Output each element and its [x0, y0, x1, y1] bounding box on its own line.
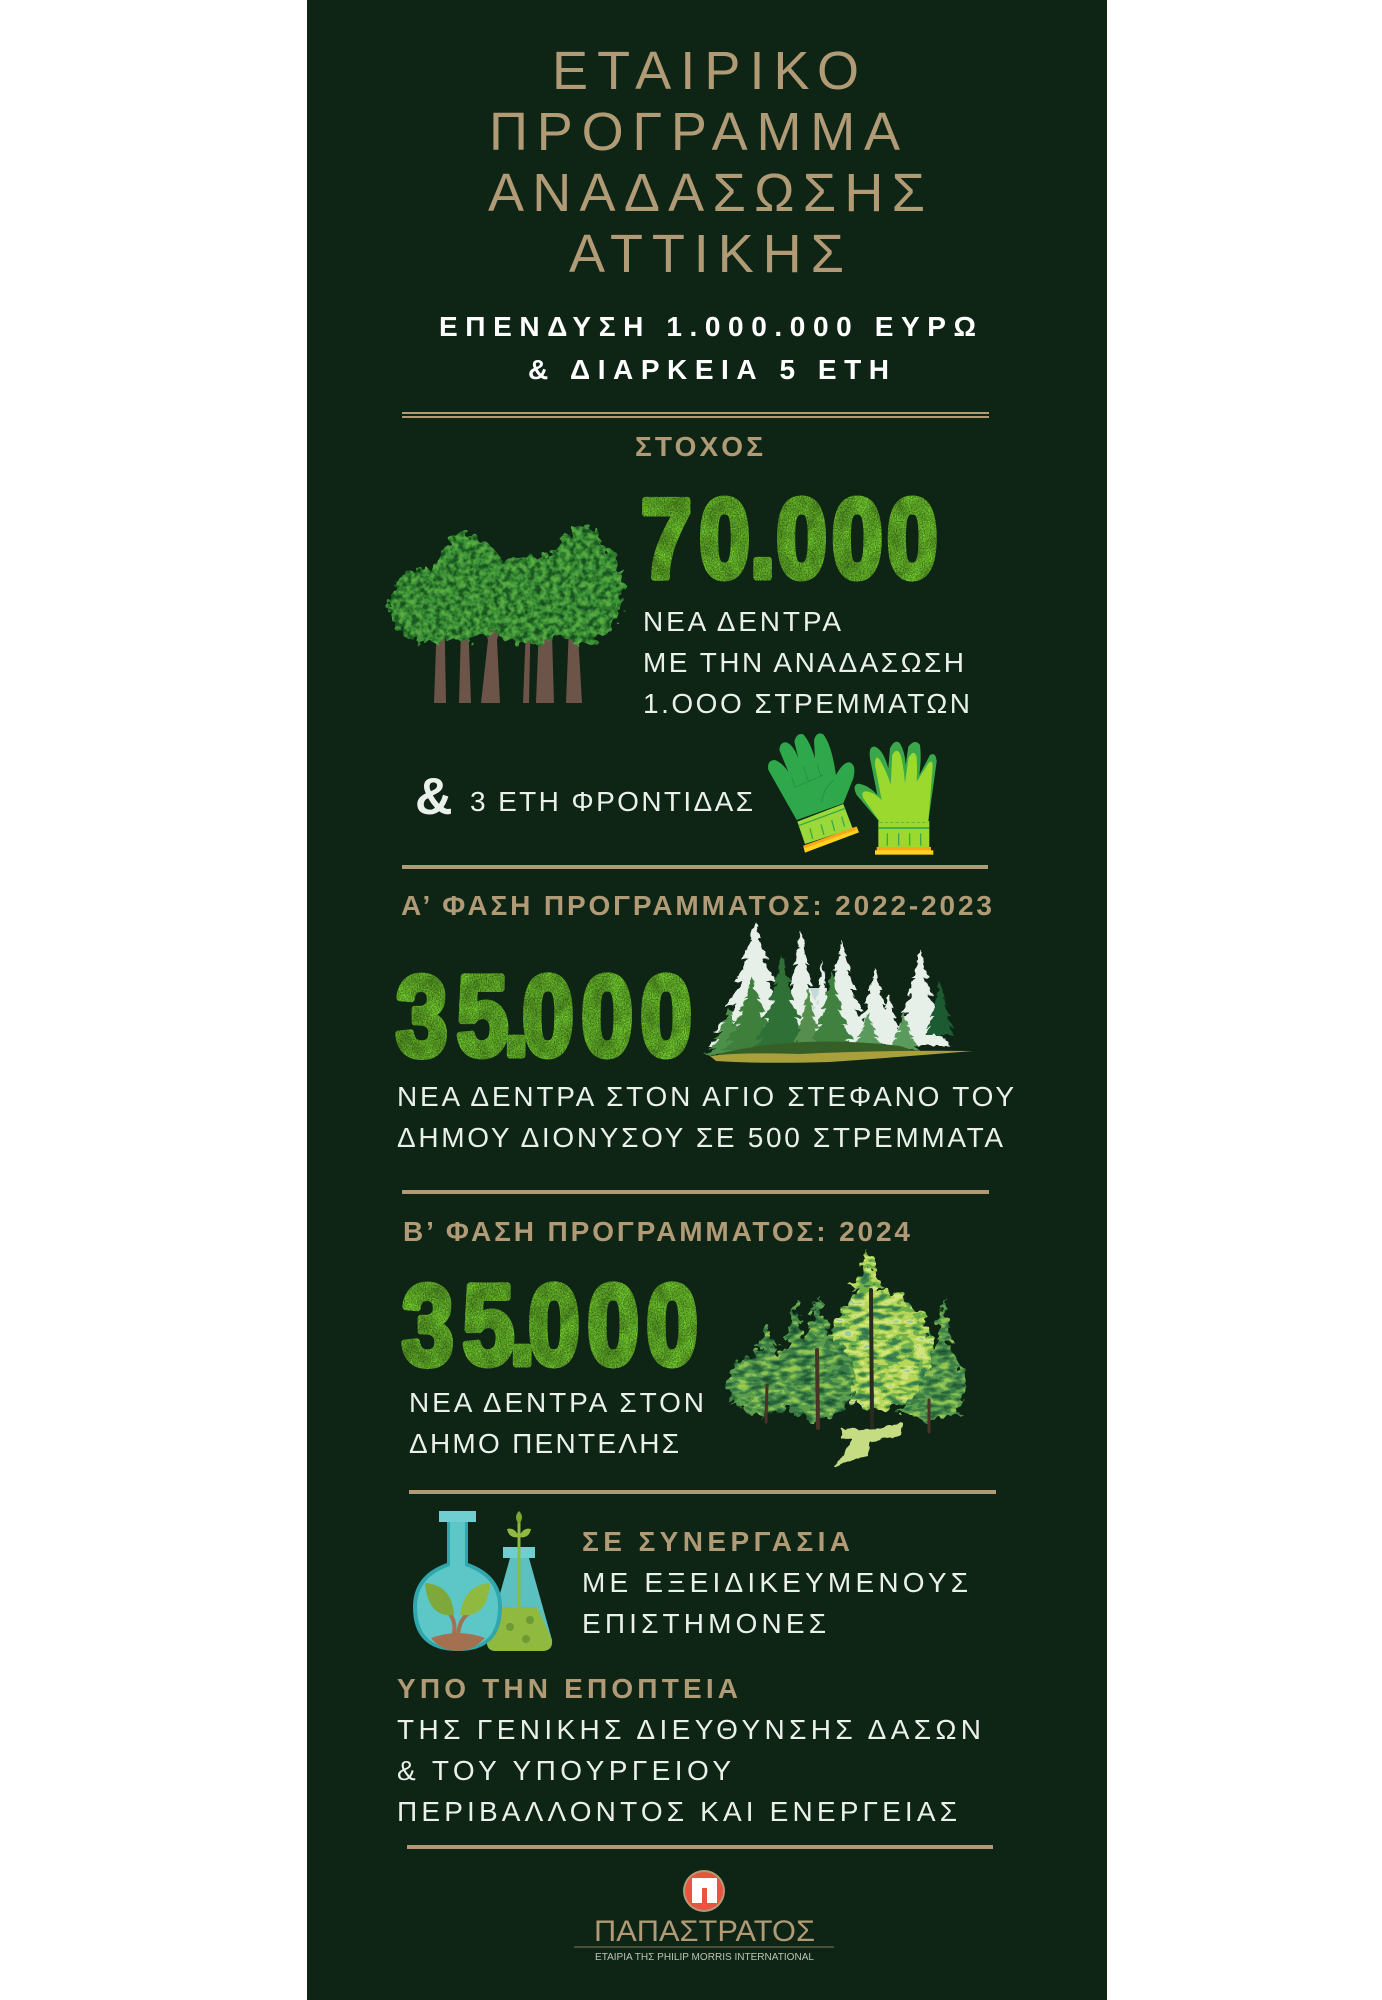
big number: 35.000: 35.000: [396, 952, 692, 1079]
text: Agios Stefanos location: ΝΕΑ ΔΕΝΤΡΑ ΣΤΟΝ ΑΓΙΟ ΣΤΕΦΑΝΟ ΤΟΥ: [397, 1081, 1014, 1112]
subtitle: investment and duration: & ΔΙΑΡΚΕΙΑ 5 ΕΤΗ: [528, 354, 889, 385]
logo: Papastratos: [574, 1870, 834, 1963]
illustration: conifer forest: [705, 922, 973, 1063]
icon: flasks with plant: [413, 1511, 552, 1651]
title: ΕΤΑΙΡΙΚΟ: [552, 41, 859, 101]
text block: under supervision: ΤΗΣ ΓΕΝΙΚΗΣ ΔΙΕΥΘΥΝΣΗΣ ΔΑΣΩΝ: [397, 1714, 981, 1745]
text: and 3 years of care: [415, 768, 753, 826]
title: ΠΡΟΓΡΑΜΜΑ: [489, 102, 900, 162]
section: scientists collaboration: [413, 1511, 968, 1651]
subtitle: investment and duration: [439, 311, 976, 385]
illustration: group of broadleaf trees: [390, 526, 624, 703]
text block: under supervision: & ΤΟΥ ΥΠΟΥΡΓΕΙΟΥ: [397, 1755, 731, 1786]
title: ΑΝΑΔΑΣΩΣΗΣ: [488, 163, 925, 223]
subtitle: investment and duration: ΕΠΕΝΔΥΣΗ 1.000.000 ΕΥΡΩ: [439, 311, 976, 342]
text: Agios Stefanos location: [397, 1081, 1014, 1153]
text: with specialist scientists: ΣΕ ΣΥΝΕΡΓΑΣΙΑ: [582, 1526, 850, 1557]
text: Agios Stefanos location: ΔΗΜΟΥ ΔΙΟΝΥΣΟΥ ΣΕ 500 ΣΤΡΕΜΜΑΤΑ: [397, 1122, 1003, 1153]
icon: gardening gloves: [768, 733, 937, 855]
section: phase B: [402, 1216, 965, 1467]
title: [488, 41, 925, 284]
text: with specialist scientists: [582, 1526, 968, 1639]
left glove: [768, 733, 859, 853]
logo tagline: ΕΤΑΙΡΙΑ ΤΗΣ PHILIP MORRIS INTERNATIONAL: [595, 1951, 814, 1963]
heading: phase A: Α’ ΦΑΣΗ ΠΡΟΓΡΑΜΜΑΤΟΣ: 2022-2023: [401, 890, 992, 921]
text: new trees and reforestation area: 1.ΟΟΟ ΣΤΡΕΜΜΑΤΩΝ: [643, 688, 970, 719]
text: new trees and reforestation area: ΝΕΑ ΔΕΝΤΡΑ: [643, 606, 841, 637]
logo mark: [683, 1870, 725, 1912]
text: and 3 years of care: 3 ΕΤΗ ΦΡΟΝΤΙΔΑΣ: [470, 786, 753, 817]
text: Penteli municipality: ΝΕΑ ΔΕΝΤΡΑ ΣΤΟΝ: [409, 1387, 704, 1418]
right glove: [855, 742, 937, 855]
section: goal: [390, 431, 970, 855]
title: ΑΤΤΙΚΗΣ: [569, 224, 844, 284]
text: new trees and reforestation area: ΜΕ ΤΗΝ ΑΝΑΔΑΣΩΣΗ: [643, 647, 964, 678]
big number: 35.000 second: 35.000: [402, 1261, 698, 1388]
section: phase A: [396, 890, 1014, 1153]
text block: under supervision: ΥΠΟ ΤΗΝ ΕΠΟΠΤΕΙΑ: [397, 1673, 738, 1704]
text: new trees and reforestation area: [643, 606, 970, 719]
panel: dark green background: [307, 0, 1107, 2000]
heading: phase B: Β’ ΦΑΣΗ ΠΡΟΓΡΑΜΜΑΤΟΣ: 2024: [403, 1216, 910, 1247]
text: with specialist scientists: ΜΕ ΕΞΕΙΔΙΚΕΥΜΕΝΟΥΣ: [582, 1567, 968, 1598]
heading: goal: ΣΤΟΧΟΣ: [635, 431, 763, 462]
text: Penteli municipality: ΔΗΜΟ ΠΕΝΤΕΛΗΣ: [409, 1428, 679, 1459]
text: Penteli municipality: [409, 1387, 704, 1459]
text block: under supervision: [397, 1673, 981, 1827]
big number: 70.000: 70.000: [641, 476, 938, 601]
logo wordmark: ΠΑΠΑΣΤΡΑΤΟΣ: [594, 1915, 815, 1948]
text: and 3 years of care: &: [415, 768, 453, 826]
illustration: watercolor pine trees: [727, 1250, 965, 1467]
text block: under supervision: ΠΕΡΙΒΑΛΛΟΝΤΟΣ ΚΑΙ ΕΝΕΡΓΕΙΑΣ: [397, 1796, 957, 1827]
text: with specialist scientists: ΕΠΙΣΤΗΜΟΝΕΣ: [582, 1608, 826, 1639]
